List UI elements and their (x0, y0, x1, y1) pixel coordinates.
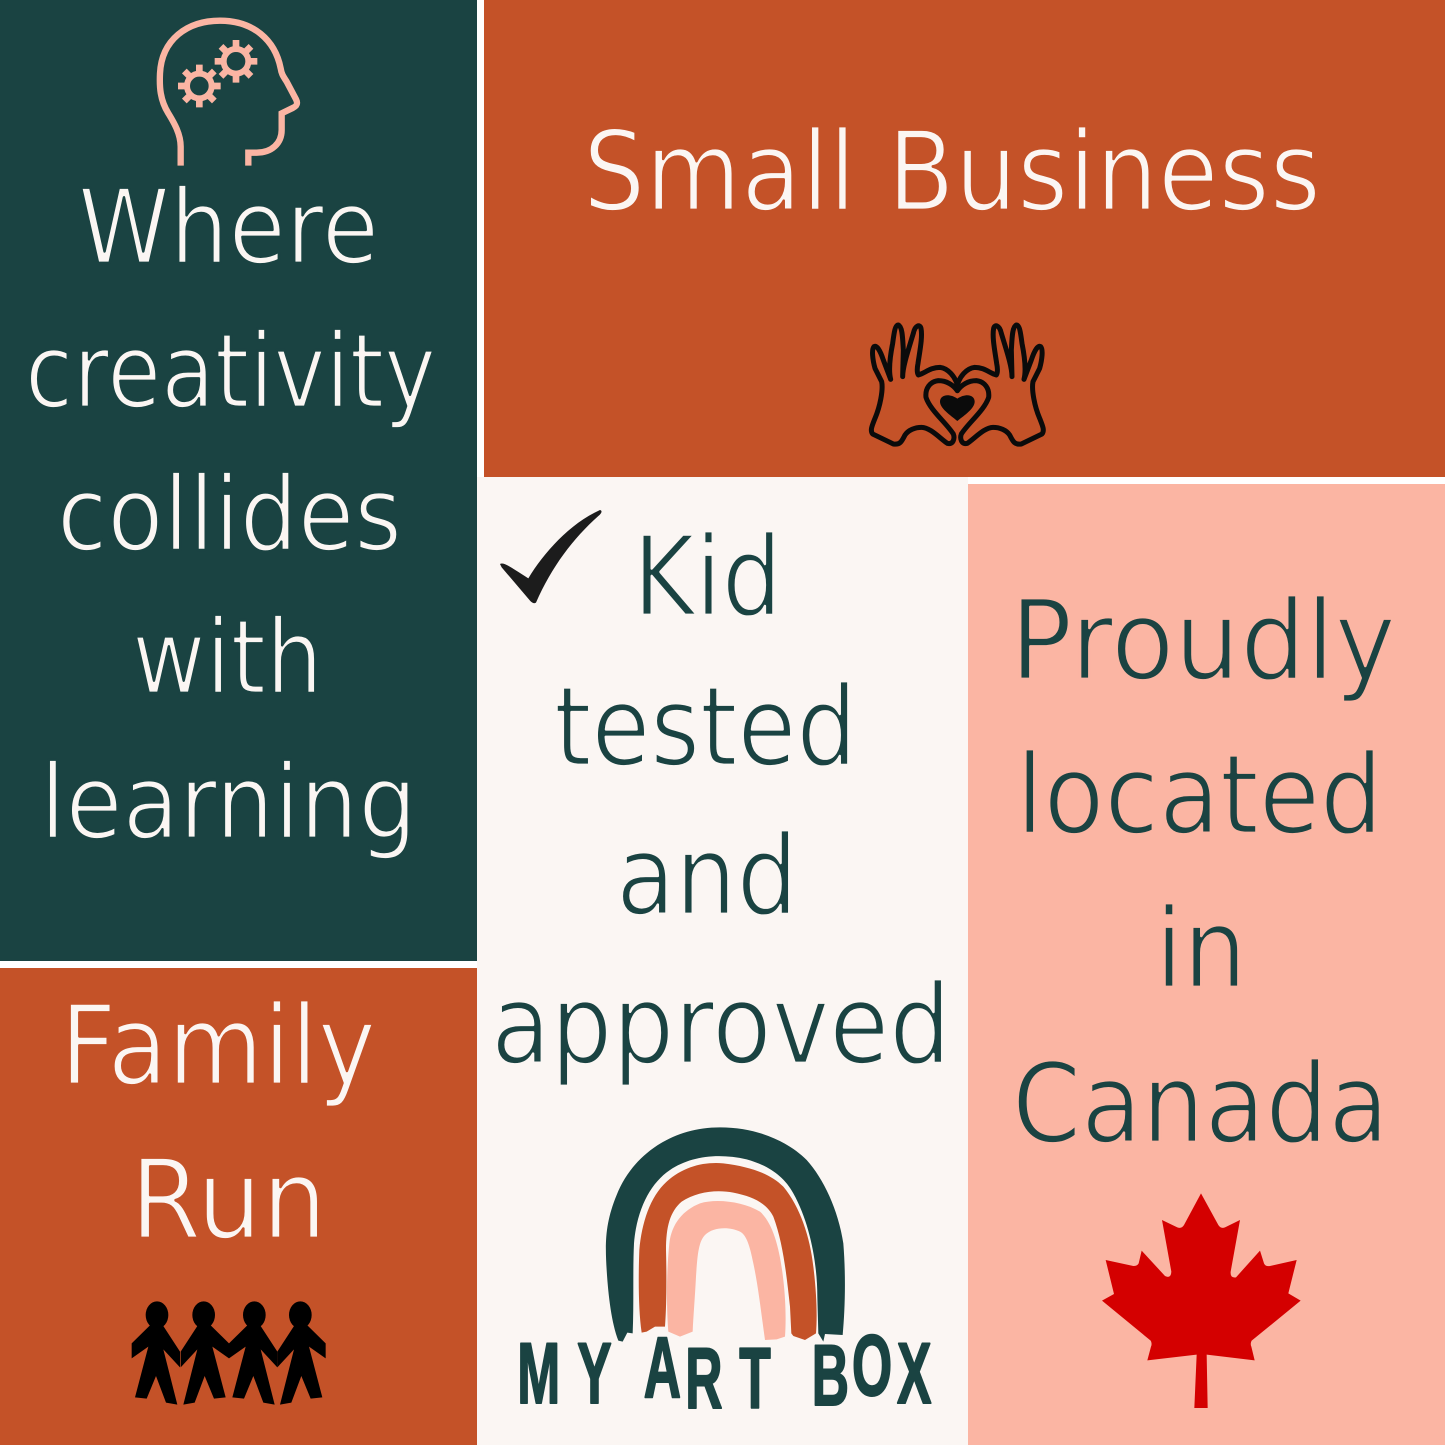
heading: where creativity collides with learning: creativity (25, 312, 436, 432)
icon: hands forming a heart (871, 325, 1043, 444)
heading: family run (60, 982, 376, 1265)
heading: proudly located in canada: Canada (1012, 1040, 1389, 1169)
heading: kid tested and approved: and (616, 812, 798, 941)
heading: where creativity collides with learning (25, 168, 436, 863)
rainbow (606, 1127, 845, 1342)
heading: where creativity collides with learning: learning (40, 743, 417, 863)
panel: family run (0, 968, 477, 1445)
heading: where creativity collides with learning: Where (78, 168, 379, 288)
heading: small business: Small Business (583, 108, 1321, 237)
icon: check mark (500, 510, 602, 603)
heading: proudly located in canada (1010, 577, 1396, 1169)
heading: proudly located in canada: in (1155, 885, 1247, 1014)
heading: family run: Family (60, 982, 376, 1111)
heading: where creativity collides with learning: collides (57, 455, 402, 575)
heading: proudly located in canada: located (1016, 731, 1383, 860)
panel: proudly located in canada (968, 484, 1445, 1445)
icon: head with gears (160, 21, 297, 166)
heading: proudly located in canada: Proudly (1010, 577, 1396, 706)
icon: paper doll family (132, 1301, 326, 1405)
icon: canadian maple leaf (1102, 1193, 1301, 1408)
heading: kid tested and approved (491, 513, 951, 1090)
logo wordmark: MY (517, 1327, 612, 1422)
logo: my art box rainbow (517, 1127, 931, 1427)
logo wordmark (517, 1319, 931, 1427)
heading: family run: Run (130, 1136, 327, 1265)
heading: kid tested and approved: approved (491, 961, 951, 1090)
panel: creativity and learning (0, 0, 477, 961)
logo wordmark: BOX (812, 1319, 931, 1424)
logo wordmark: ART (644, 1321, 771, 1427)
heading: kid tested and approved: Kid (633, 513, 782, 642)
panel: small business (484, 0, 1445, 477)
panel: kid tested and approved (477, 477, 968, 1445)
heading: kid tested and approved: tested (554, 663, 857, 792)
heading: where creativity collides with learning: with (132, 598, 323, 718)
